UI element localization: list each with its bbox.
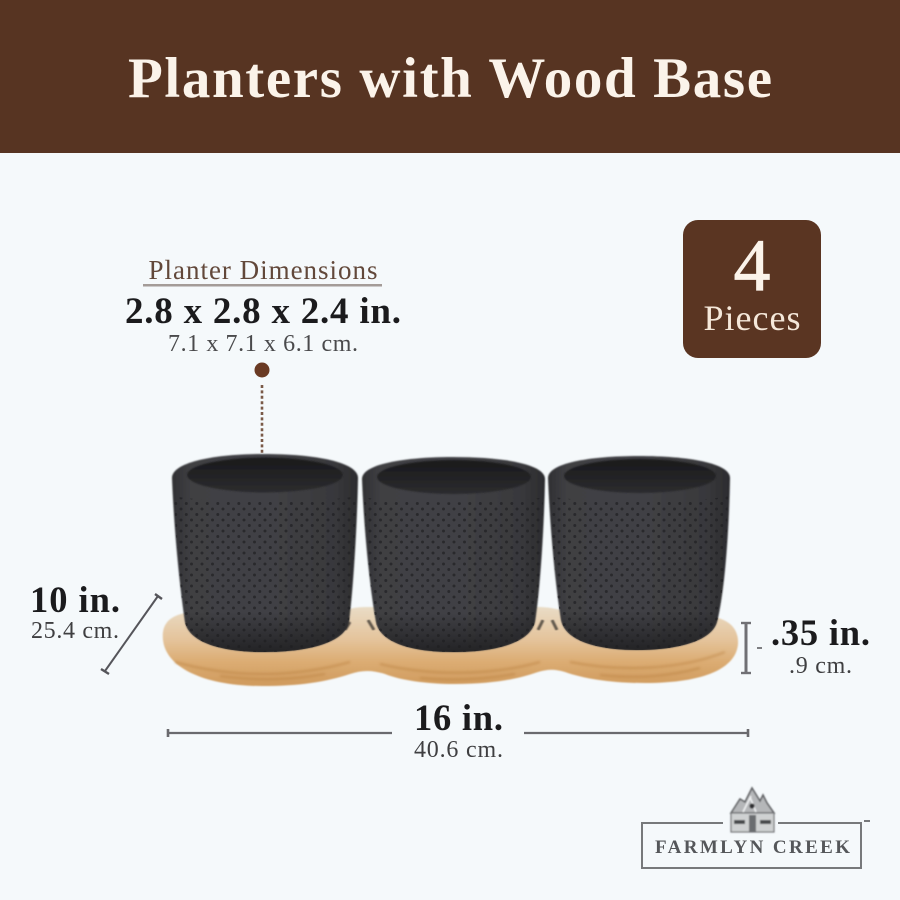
planter 1 xyxy=(172,454,358,652)
badge label: Pieces xyxy=(704,298,800,338)
peg shadows xyxy=(345,620,557,630)
height label: .35 in.: .35 in. xyxy=(771,612,870,653)
width label: 16 in.: 16 in. xyxy=(414,697,503,738)
dimensions in inches: 2.8 x 2.8 x 2.4 in. xyxy=(125,291,401,332)
height label: .35 in. xyxy=(771,612,870,679)
width label: 16 in.: 40.6 cm. xyxy=(414,737,503,763)
depth arrow xyxy=(101,594,162,674)
badge: 4 pieces xyxy=(683,220,821,358)
width arrow xyxy=(168,729,748,737)
dotted leader xyxy=(254,362,270,455)
brand logo xyxy=(642,788,870,868)
planter 3 xyxy=(548,456,730,650)
logo frame xyxy=(642,823,861,868)
wood base xyxy=(163,607,738,686)
planter dimensions text block xyxy=(125,255,401,357)
badge number: 4 xyxy=(734,225,770,307)
planter 2 xyxy=(362,457,545,652)
header banner xyxy=(0,0,900,153)
dimensions heading: Planter Dimensions xyxy=(148,255,378,285)
height label: .35 in.: .9 cm. xyxy=(789,653,852,679)
depth label: 10 in.: 10 in. xyxy=(30,579,120,620)
dimensions in centimeters: 7.1 x 7.1 x 6.1 cm. xyxy=(168,331,358,357)
depth label: 10 in.: 25.4 cm. xyxy=(31,618,119,644)
wood grain xyxy=(175,652,725,680)
trademark mark xyxy=(864,820,870,822)
height bracket xyxy=(741,623,762,673)
base body xyxy=(163,607,738,686)
brand name: FARMLYN CREEK xyxy=(655,837,850,858)
width label: 16 in. xyxy=(414,697,503,763)
icon: house xyxy=(731,788,774,832)
depth label: 10 in. xyxy=(30,579,120,644)
title: Planters with Wood Base xyxy=(128,47,772,110)
